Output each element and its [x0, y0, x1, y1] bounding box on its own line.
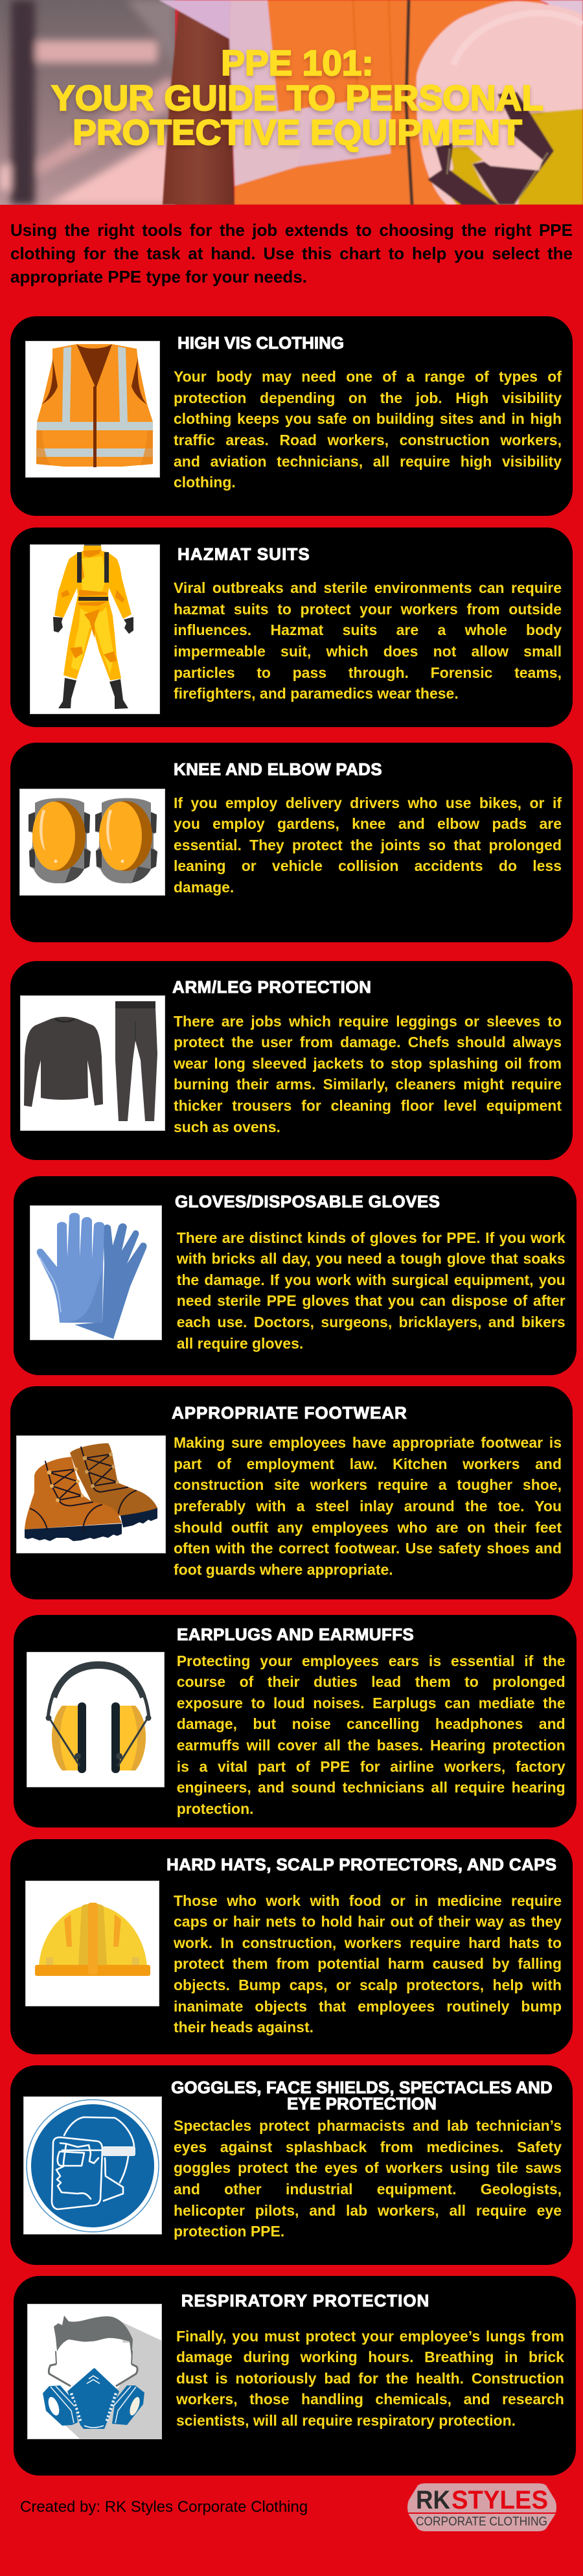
intro text: clothing for the task at hand. Use this chart to help you select the: [10, 244, 573, 263]
logo: RK Styles Corporate Clothing: RK: [416, 2486, 450, 2514]
text: arm/leg protection: such as ovens.: [174, 1119, 280, 1135]
text: knee and elbow pads: [174, 795, 562, 896]
intro text: appropriate PPE type for your needs.: [10, 267, 307, 286]
text: respiratory protection: scientists, will all require respiratory protection.: [176, 2412, 516, 2429]
logo: RK Styles Corporate Clothing: STYLES: [452, 2486, 548, 2514]
text: gloves: the damage. If you work with surgical equipment, you: [177, 1271, 566, 1288]
text: knee and elbow pads: damage.: [174, 879, 234, 896]
text: hard hats: their heads against.: [174, 2019, 314, 2036]
icon: work boots: [16, 1435, 166, 1553]
text: eye protection: eyes against splashback from medicines. Safety: [174, 2139, 562, 2155]
text: appropriate footwear: often with the correct footwear. Use safety shoes and: [174, 1540, 562, 1557]
icon: base layer top and leggings: [19, 995, 165, 1131]
text: eye protection: [174, 2117, 562, 2240]
icon: knee pads: [19, 789, 165, 896]
text: earplugs and earmuffs: exposure to loud noises. Earplugs can mediate the: [177, 1695, 566, 1712]
text: earplugs and earmuffs: damage, but noise cancelling headphones and: [177, 1715, 566, 1732]
heading: eye protection: [171, 2078, 553, 2113]
text: earplugs and earmuffs: is a vital part of PPE for airline workers, factory: [177, 1758, 566, 1775]
text: respiratory protection: [176, 2328, 564, 2429]
title: [51, 43, 544, 156]
text: knee and elbow pads: leaning or vehicle collision accidents do less: [174, 857, 562, 874]
panel: earplugs and earmuffs: [14, 1615, 577, 1828]
text: appropriate footwear: Making sure employees have appropriate footwear is: [174, 1434, 562, 1451]
text: gloves: There are distinct kinds of gloves for PPE. If you work: [177, 1229, 566, 1246]
title: PROTECTIVE EQUIPMENT: [73, 111, 522, 152]
text: hard hats: objects. Bump caps, or scalp protectors, help with: [174, 1977, 562, 1993]
text: hazmat suits: firefighters, and paramedics wear these.: [174, 685, 459, 702]
text: gloves: need sterile PPE gloves that you can dispose of after: [177, 1292, 566, 1309]
text: hazmat suits: influences. Hazmat suits are a whole body: [174, 621, 562, 638]
heading: knee and elbow pads: KNEE AND ELBOW PADS: [174, 760, 382, 779]
panel: appropriate footwear: [10, 1386, 573, 1599]
text: eye protection: and other industrial equipment. Geologists,: [174, 2181, 562, 2198]
text: arm/leg protection: wear long sleeved jackets to stop splashing oil from: [174, 1055, 562, 1072]
text: hard hats: [174, 1892, 562, 2036]
text: high vis clothing: [174, 368, 562, 491]
text: high vis clothing: traffic areas. Road workers, construction workers,: [174, 432, 562, 448]
text: eye protection: helicopter pilots, and lab workers, all require eye: [174, 2202, 562, 2219]
text: hard hats: caps or hair nets to hold hair out of their way as they: [174, 1913, 562, 1930]
text: earplugs and earmuffs: [177, 1653, 566, 1817]
icon: high vis vest: [25, 341, 160, 478]
panel: arm/leg protection: [10, 961, 573, 1160]
text: appropriate footwear: preferably with a steel inlay around the toe. You: [174, 1498, 562, 1514]
title: PPE 101:: [221, 43, 374, 83]
panel: hazmat suits: [10, 528, 573, 727]
heading: arm/leg protection: ARM/LEG PROTECTION: [172, 977, 371, 997]
text: hazmat suits: Viral outbreaks and sterile environments can require: [174, 579, 562, 596]
text: high vis clothing: clothing.: [174, 474, 236, 491]
text: hazmat suits: impermeable suit, which does not allow small: [174, 643, 562, 660]
panel: respiratory protection: [14, 2276, 576, 2476]
text: appropriate footwear: part of employment law. Kitchen workers and: [174, 1456, 562, 1472]
icon: hazmat suit: [30, 544, 160, 714]
heading: gloves: GLOVES/DISPOSABLE GLOVES: [175, 1192, 440, 1211]
icon: earmuffs: [27, 1652, 165, 1787]
text: gloves: all require gloves.: [177, 1335, 303, 1352]
icon: hard hat: [25, 1881, 159, 2006]
text: appropriate footwear: [174, 1434, 562, 1578]
panel: knee and elbow pads: [10, 743, 573, 942]
heading: respiratory protection: RESPIRATORY PROTECTION: [181, 2291, 429, 2310]
footer credit: Created by: RK Styles Corporate Clothing: [20, 2498, 308, 2516]
panel: hard hats: [10, 1839, 573, 2054]
text: arm/leg protection: thicker trousers for cleaning floor level equipment: [174, 1097, 562, 1114]
text: gloves: [176, 1229, 566, 1352]
text: knee and elbow pads: you employ gardens, knee and elbow pads are: [174, 815, 562, 832]
text: earplugs and earmuffs: Protecting your employees ears is essential if the: [177, 1653, 566, 1669]
text: respiratory protection: Finally, you must protect your employee’s lungs from: [176, 2328, 564, 2345]
heading: appropriate footwear: APPROPRIATE FOOTWEAR: [172, 1403, 407, 1422]
header banner photo: [0, 0, 583, 205]
logo: RK Styles Corporate Clothing: [407, 2483, 556, 2531]
heading: eye protection: GOGGLES, FACE SHIELDS, SPECTACLES AND: [171, 2078, 553, 2097]
heading: eye protection: EYE PROTECTION: [287, 2094, 437, 2113]
text: gloves: each use. Doctors, surgeons, bricklayers, and bikers: [177, 1314, 566, 1330]
text: knee and elbow pads: If you employ delivery drivers who use bikes, or if: [174, 795, 562, 811]
text: hard hats: work. In construction, workers require hard hats to: [174, 1934, 562, 1951]
text: appropriate footwear: should outfit any employees who are on their feet: [174, 1519, 562, 1536]
intro text: Using the right tools for the job extends to choosing the right PPE: [10, 220, 573, 240]
text: knee and elbow pads: essential. They protect the joints so that prolonged: [174, 837, 562, 853]
text: hard hats: Those who work with food or in medicine require: [174, 1892, 562, 1909]
text: eye protection: protection PPE.: [174, 2223, 284, 2240]
text: eye protection: goggles protect the eyes of workers using tile saws: [174, 2159, 562, 2176]
logo: RK Styles Corporate Clothing: CORPORATE CLOTHING: [416, 2515, 547, 2529]
text: arm/leg protection: There are jobs which require leggings or sleeves to: [174, 1013, 562, 1030]
icon: face shield sign: [23, 2096, 162, 2234]
text: arm/leg protection: [174, 1013, 562, 1135]
text: arm/leg protection: protect the user from damage. Chefs should always: [174, 1034, 562, 1050]
heading: hard hats: HARD HATS, SCALP PROTECTORS, AND CAPS: [166, 1855, 556, 1874]
text: hard hats: inanimate objects that employees routinely bump: [174, 1998, 562, 2015]
text: eye protection: Spectacles protect pharmacists and lab technician’s: [174, 2117, 562, 2134]
panel: gloves: [14, 1176, 577, 1375]
text: earplugs and earmuffs: engineers, and sound technicians all require hearing: [177, 1779, 566, 1796]
heading: earplugs and earmuffs: EARPLUGS AND EARMUFFS: [177, 1625, 414, 1644]
title: YOUR GUIDE TO PERSONAL: [51, 78, 543, 118]
text: hard hats: protect them from potential harm caused by falling: [174, 1955, 562, 1972]
text: respiratory protection: dust is notoriously bad for the health. Construction: [176, 2370, 564, 2387]
text: respiratory protection: workers, those handling chemicals, and research: [176, 2391, 564, 2408]
heading: hazmat suits: HAZMAT SUITS: [177, 544, 310, 564]
icon: blue gloves: [30, 1205, 162, 1340]
text: high vis clothing: and aviation technicians, all require high visibility: [174, 453, 562, 470]
text: high vis clothing: Your body may need one of a range of types of: [174, 368, 562, 385]
text: arm/leg protection: burning their arms. Similarly, cleaners might require: [174, 1076, 562, 1093]
text: earplugs and earmuffs: course of their duties lead them to prolonged: [177, 1673, 566, 1690]
text: hazmat suits: hazmat suits to protect your workers from outside: [174, 601, 562, 618]
intro text: [10, 220, 573, 286]
text: hazmat suits: particles to pass through. Forensic teams,: [174, 664, 562, 681]
text: appropriate footwear: foot guards where appropriate.: [174, 1561, 393, 1578]
text: hazmat suits: [174, 579, 562, 702]
text: earplugs and earmuffs: protection.: [177, 1800, 254, 1817]
text: appropriate footwear: construction site workers require a tougher shoe,: [174, 1476, 562, 1493]
text: earplugs and earmuffs: earmuffs will cover all the bases. Hearing protection: [177, 1737, 566, 1754]
panel: high vis clothing: [10, 316, 573, 516]
text: respiratory protection: damage during working hours. Breathing in brick: [176, 2349, 564, 2365]
panel: eye protection: [10, 2065, 573, 2265]
text: high vis clothing: protection depending on the job. High visibility: [174, 389, 562, 406]
text: gloves: with bricks all day, you need a tough glove that soaks: [177, 1250, 566, 1267]
text: high vis clothing: clothing keeps you safe on building sites and in high: [174, 410, 562, 427]
icon: respirator mask: [27, 2304, 162, 2439]
heading: high vis clothing: HIGH VIS CLOTHING: [177, 333, 344, 353]
